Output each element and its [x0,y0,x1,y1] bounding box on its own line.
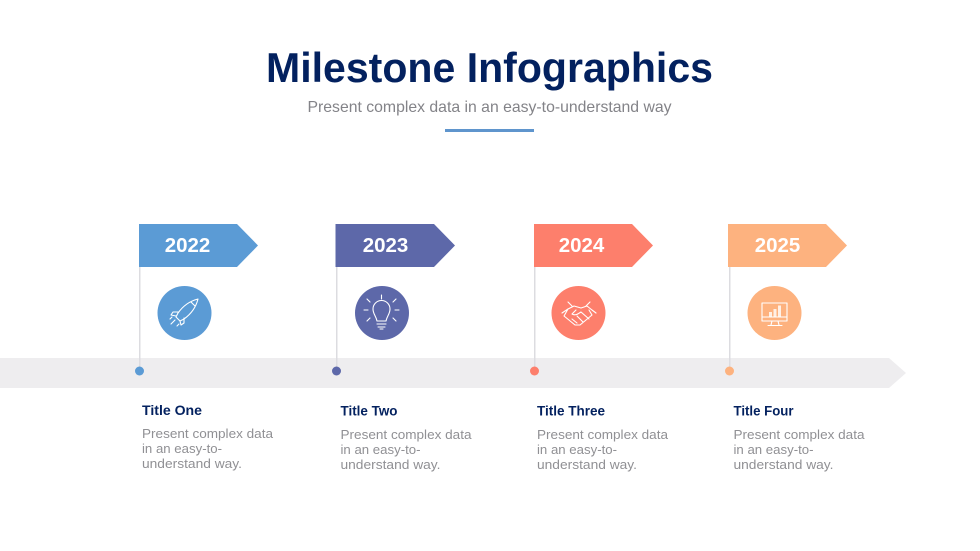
flag 2025: 2025 [755,234,800,257]
flag 2024: 2024 [559,234,605,257]
text block: title three: in an easy-to- [537,442,617,457]
text block: title three: understand way. [537,457,637,472]
flag pole 2023 [336,266,338,371]
flag pole 2025 [729,266,730,371]
text block: title three: Title Three [537,402,605,418]
text block: title two: Present complex data [340,427,472,442]
icon: handshake [552,286,606,340]
flag pole 2024 [534,266,536,371]
text block: title one: in an easy-to- [142,441,222,456]
title: Milestone Infographics [266,44,713,91]
text block: title two [340,402,472,472]
flag 2022 [139,224,258,267]
text block: title one: Present complex data [142,426,274,441]
flag 2023 [336,224,455,267]
milestone 2025 [725,224,847,376]
timeline dot 2022 [135,366,144,376]
milestone 2024 [530,224,653,376]
text block: title four: in an easy-to- [734,442,814,457]
text block: title four: Present complex data [734,427,865,442]
text block: title two: Title Two [340,402,398,418]
timeline dot 2023 [332,366,341,376]
title underline [445,129,534,132]
timeline dot 2025 [725,366,734,376]
text block: title four [734,402,865,472]
text block: title four: understand way. [734,457,834,472]
timeline arrow band [0,358,906,388]
flag pole 2022 [139,266,140,371]
text block: title two: in an easy-to- [340,442,420,457]
icon: light bulb [355,286,409,340]
text block: title one [142,402,274,471]
milestone 2022 [135,224,258,376]
icon: rocket [158,286,212,340]
milestone 2023 [332,224,455,376]
flag 2022: 2022 [165,234,210,257]
text block: title one: Title One [142,402,202,418]
timeline dot 2024 [530,366,539,376]
flag 2024 [534,224,653,267]
text block: title four: Title Four [734,402,794,418]
text block: title three: Present complex data [537,427,669,442]
flag 2025 [728,224,847,267]
icon: monitor chart [748,286,802,340]
flag 2023: 2023 [363,234,408,257]
subtitle: Present complex data in an easy-to-understand way [308,99,672,116]
text block: title two: understand way. [340,457,440,472]
text block: title three [537,402,669,472]
text block: title one: understand way. [142,456,242,471]
